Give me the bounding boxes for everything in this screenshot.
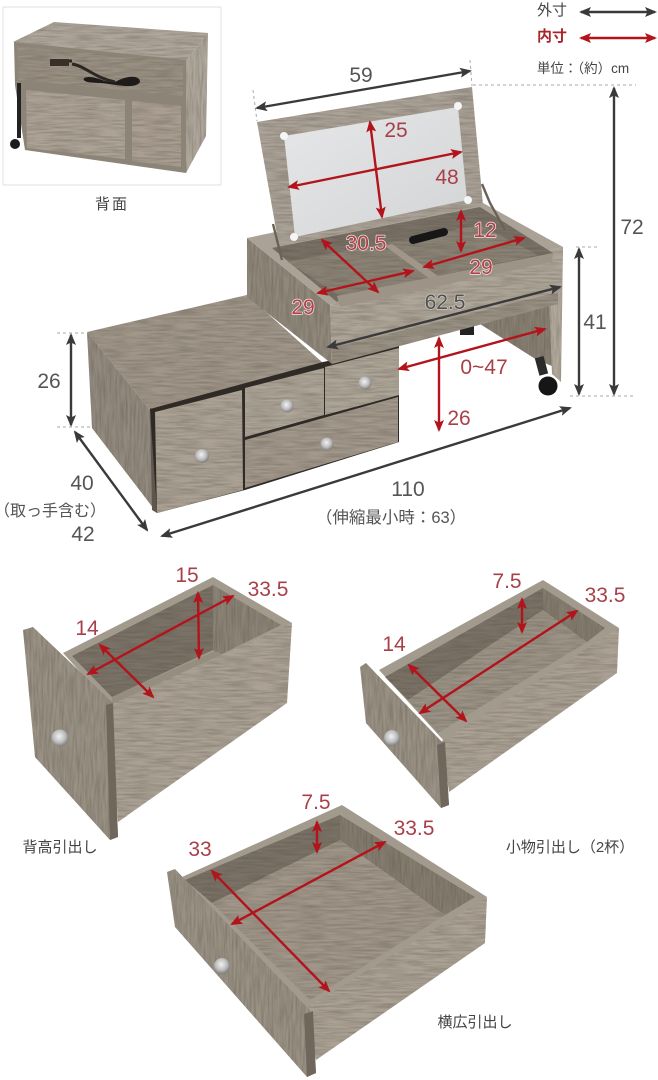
dimension: compartment 29 right: [424, 238, 524, 279]
dimension: height 41: 41: [583, 311, 607, 334]
dimension: clearance 26: [439, 338, 471, 430]
panel: back view photo: [3, 7, 221, 185]
dimension: compartment 29 left: 29: [291, 296, 315, 319]
rear caster: [460, 324, 474, 335]
dimension: unit height 26: 26: [37, 370, 61, 393]
panel: small drawer: [360, 580, 619, 808]
dimension: small drawer 14: [382, 633, 466, 721]
caption: back: 背面: [95, 196, 129, 213]
leg front strip: [549, 247, 563, 382]
unit side: [87, 332, 157, 513]
dimension: compartment 29 right: 29: [469, 256, 493, 279]
front ledge: [337, 253, 553, 307]
leg inner face: [480, 298, 552, 366]
panel: lower drawer unit: [87, 295, 399, 513]
legend: [537, 2, 655, 76]
dimension: tall drawer 15: 15: [175, 564, 199, 587]
dimension: total width 110: 110: [391, 478, 425, 501]
dimension: mirror height 25: 25: [384, 119, 408, 142]
dimension: small drawer 33.5: 33.5: [585, 584, 625, 607]
lid: [257, 87, 483, 246]
panel: wide drawer: [167, 805, 487, 1077]
dimension: compartment 29 left: [291, 271, 413, 319]
dimension: compartment 30.5: [322, 232, 386, 292]
desk left side: [247, 238, 332, 364]
dimension: depth 12: 12: [473, 219, 497, 242]
dimension: depth 12: [461, 211, 497, 251]
dimension: extension 0~47: [399, 329, 545, 379]
legend: outer dimension: 外寸: [537, 2, 567, 19]
dimension: mirror height 25: [370, 119, 408, 217]
dimension: unit height 26: [37, 335, 71, 425]
dimension: clearance 26: 26: [447, 407, 471, 430]
wide drawer: [245, 397, 398, 488]
dimension: tall drawer 14: [75, 617, 153, 697]
caption: small drawer: 小物引出し（2杯）: [506, 839, 634, 856]
dimension: wide drawer 33.5: 33.5: [394, 817, 434, 840]
guide lines: [57, 60, 636, 427]
dimension: desk width 62.5: 62.5: [425, 291, 465, 314]
knob: [52, 730, 68, 746]
interior back wall: [272, 207, 553, 302]
dimension: depth 40 / 42: 42: [71, 523, 95, 546]
dimension: lid width 59: [257, 64, 470, 108]
small drawer right: [325, 348, 399, 415]
dimension: mirror width 48: [289, 152, 461, 189]
knobs: [195, 376, 372, 463]
dimension: extension 0~47: 0~47: [460, 356, 508, 379]
dimension: wide drawer 33.5: [232, 817, 434, 924]
hinges: [273, 184, 505, 260]
dimension: lid width 59: 59: [349, 64, 373, 87]
dimension: wide drawer 7.5: 7.5: [301, 791, 331, 814]
mirror: [284, 107, 467, 237]
legend: inner dimension: 内寸: [537, 28, 567, 45]
dimension: tall drawer 33.5: 33.5: [248, 578, 288, 601]
caption: wide drawer: 横広引出し: [437, 1014, 513, 1031]
desk front: [330, 247, 563, 364]
dimension: wide drawer 33: 33: [188, 838, 212, 861]
caster: [535, 356, 558, 396]
dimension: tall drawer 15: [175, 564, 199, 658]
tall drawer front: [155, 390, 243, 513]
rim: [247, 203, 563, 305]
dimension: height 72: 72: [620, 216, 644, 239]
dimension: total width 110: （伸縮最小時：63）: [316, 508, 466, 527]
gap: [150, 346, 399, 513]
panel: tall drawer: [23, 577, 292, 840]
dimension: tall drawer 14: 14: [75, 617, 99, 640]
panel: dresser desk: [247, 87, 563, 396]
dimension: depth 40 / 42: [0, 432, 147, 546]
dimension: small drawer 33.5: [420, 584, 625, 713]
unit note: 単位：（約）cm: [537, 61, 629, 76]
caption: tall drawer: 背高引出し: [22, 839, 98, 856]
unit top: [87, 295, 323, 410]
mirror clips: [280, 102, 472, 241]
dimension: small drawer 7.5: 7.5: [492, 570, 522, 593]
dimension: depth 40 / 42: 40: [70, 472, 94, 495]
dimension: total width 110: [162, 408, 570, 536]
knob: [214, 958, 230, 974]
dimension: wide drawer 33: [188, 838, 329, 991]
knob: [384, 730, 400, 746]
small drawer left: [245, 368, 324, 437]
divider: [385, 244, 438, 279]
dimension: wide drawer 7.5: [301, 791, 331, 852]
dimension: desk width 62.5: [328, 287, 560, 347]
power cord: [50, 59, 140, 86]
dimension: small drawer 7.5: [492, 570, 522, 632]
dimension: small drawer 14: 14: [382, 633, 406, 656]
handle slot: [413, 232, 444, 240]
dimension: tall drawer 33.5: [88, 578, 288, 674]
dimension: compartment 30.5: 30.5: [346, 232, 386, 255]
interior floor: [288, 225, 538, 296]
dimension: mirror width 48: 48: [435, 166, 459, 189]
